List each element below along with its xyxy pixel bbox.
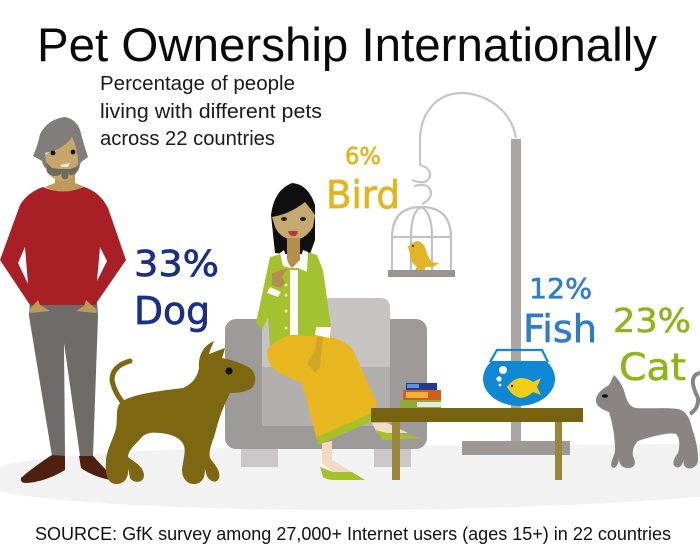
woman cuffs [267, 287, 331, 338]
table top [371, 408, 583, 422]
label: dog [134, 244, 219, 333]
books [400, 383, 441, 408]
woman jacket [256, 252, 331, 347]
chair legs [241, 446, 411, 467]
woman mouth [288, 231, 298, 236]
floor [0, 444, 700, 510]
bowl bubbles [496, 366, 507, 386]
label: cat: Cat [619, 346, 686, 389]
dog body [106, 341, 255, 484]
table legs [392, 420, 562, 480]
stand pole [511, 139, 521, 444]
label: fish: 12% [529, 272, 592, 305]
label: dog: 33% [134, 244, 219, 285]
label: dog: Dog [134, 289, 210, 333]
title: Pet Ownership Internationally [37, 18, 658, 71]
label: bird: 6% [345, 144, 381, 170]
cage wires [392, 207, 451, 271]
stand base [462, 441, 570, 455]
woman far leg and shoe [372, 423, 408, 433]
woman hand at chest [272, 268, 288, 288]
woman near leg [322, 441, 352, 472]
man trousers [29, 300, 98, 456]
cat body [596, 375, 698, 469]
dog [106, 341, 255, 484]
birdcage [388, 207, 455, 277]
man smile [60, 163, 70, 167]
cat eye [602, 394, 608, 398]
label: cat: 23% [613, 301, 691, 340]
source note: SOURCE: GfK survey among 27,000+ Internet users (ages 15+) in 22 countries [35, 524, 671, 544]
woman skirt hem [317, 413, 372, 445]
man face [45, 137, 80, 181]
cat [596, 373, 700, 469]
man beard [44, 160, 80, 180]
man sweater [0, 187, 126, 305]
chair body [225, 319, 427, 449]
cage base [388, 270, 455, 277]
woman blouse [290, 270, 298, 335]
woman face [272, 202, 315, 240]
man hair [33, 117, 88, 172]
dog tail [112, 361, 130, 404]
man neck [45, 172, 85, 192]
man hands [29, 300, 97, 313]
woman skirt [267, 335, 377, 440]
label: cat [613, 301, 691, 389]
man shoes [21, 455, 110, 483]
chair back cushion [262, 298, 390, 368]
subtitle [100, 73, 322, 150]
canary [408, 241, 439, 270]
bowl water [483, 361, 555, 406]
woman buttons [284, 284, 288, 330]
figure: man [0, 117, 126, 483]
woman hair [271, 183, 315, 254]
label: bird [326, 144, 400, 217]
dog eye [225, 367, 233, 375]
stand arc [412, 93, 516, 204]
man arm gaps [18, 247, 107, 284]
man eyes [51, 151, 55, 155]
goldfish [507, 378, 541, 398]
label: fish: Fish [523, 307, 597, 351]
woman collar [280, 250, 308, 272]
figure: woman [256, 183, 422, 480]
woman shoe [320, 467, 365, 480]
fishbowl [483, 350, 555, 406]
subtitle: living with different pets [100, 101, 322, 123]
armchair [225, 298, 427, 467]
woman neck [287, 238, 300, 268]
woman eyes [281, 217, 287, 221]
label: fish [523, 272, 597, 351]
woman hand on lap [307, 337, 323, 373]
label: bird: Bird [326, 173, 400, 217]
subtitle: Percentage of people [100, 73, 295, 95]
subtitle: across 22 countries [100, 128, 275, 150]
cat tail [690, 373, 700, 414]
bowl glass outline [490, 350, 548, 362]
coffee table [371, 383, 583, 480]
pole stand [412, 93, 570, 455]
chair seat cushion [262, 367, 390, 426]
